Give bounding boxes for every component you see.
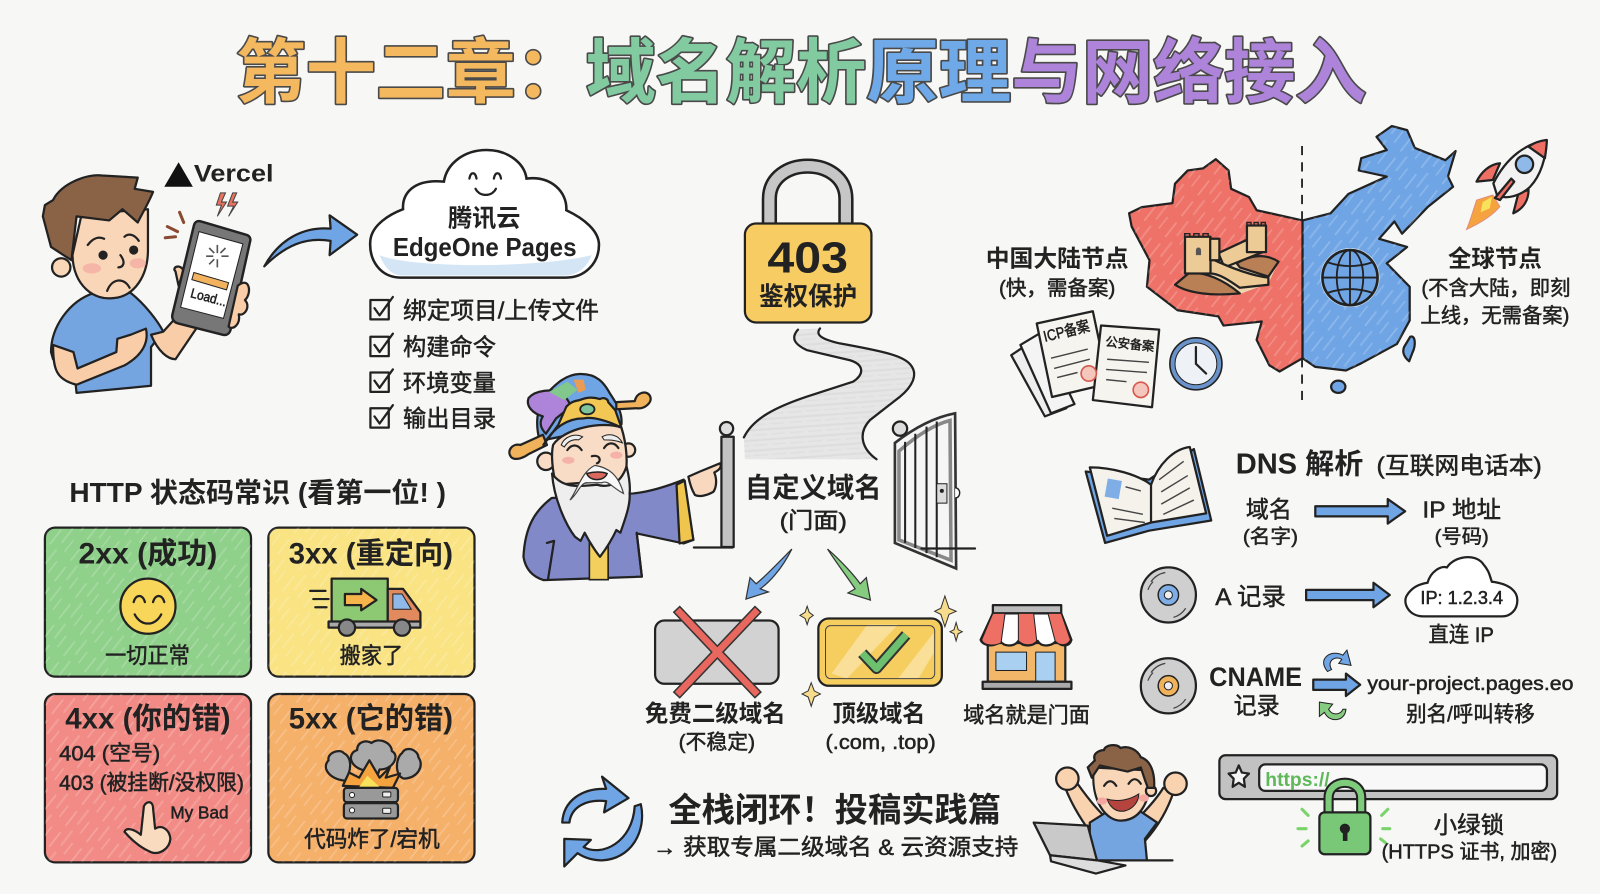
panel: 5xx: 5xx (它的错) [289, 703, 453, 736]
icon: green lock [1298, 783, 1390, 854]
CNAME row: your-project.pages.eo [1367, 673, 1573, 695]
beard [552, 466, 630, 557]
free subdomain card [645, 612, 786, 754]
browser address bar [1219, 755, 1557, 799]
cloud product: EdgeOne Pages [393, 234, 577, 262]
HTTP heading: HTTP 状态码常识 (看第一位! ) [69, 477, 446, 508]
map right labels [1420, 245, 1570, 327]
icon: clock [1170, 338, 1222, 390]
practice heading: 全栈闭环！投稿实践篇 [668, 792, 1001, 830]
arrow: green down right [828, 549, 870, 600]
panel: 2xx: 2xx (成功) [79, 537, 217, 570]
happy kid with laptop [1034, 745, 1187, 874]
IP cloud [1405, 557, 1517, 616]
icon: documents [1011, 311, 1159, 416]
worried user with phone [43, 175, 250, 393]
icon: phone book [1086, 447, 1211, 543]
map right labels: 上线，无需备案) [1420, 304, 1569, 327]
map: mainland China nodes [1129, 159, 1303, 371]
DNS heading [1236, 449, 1542, 481]
title [236, 16, 1366, 118]
icon: cycle arrows [562, 777, 642, 866]
laptop [1034, 823, 1097, 860]
road [744, 328, 914, 459]
panel: 3xx: 3xx (重定向) [289, 537, 453, 570]
map left labels [986, 245, 1129, 300]
storefront: 域名就是门面 [963, 704, 1090, 728]
checklist: 输出目录 [403, 406, 496, 432]
gate post [694, 422, 734, 548]
free subdomain card: 免费二级域名 [645, 701, 786, 727]
CNAME row [1209, 650, 1573, 727]
top-level domain card: 顶级域名 [833, 701, 926, 727]
icon: A record disc [1141, 567, 1196, 623]
panel: 3xx: 搬家了 [340, 643, 403, 668]
custom domain label [745, 472, 882, 534]
DNS heading: DNS 解析 [1236, 449, 1363, 481]
A record row: A 记录 [1215, 584, 1286, 611]
checklist: 构建命令 [403, 334, 496, 360]
arrow to cloud [264, 215, 357, 266]
CNAME row: 记录 [1234, 692, 1280, 718]
title: 原理 [866, 33, 1011, 112]
practice heading: → 获取专属二级域名 & 云资源支持 [653, 835, 1018, 860]
panel: 2xx [45, 528, 251, 677]
panel: 4xx: 404 (空号) [59, 741, 160, 765]
Vercel label [164, 161, 273, 188]
sage [509, 374, 721, 580]
panel: 4xx: 403 (被挂断/没权限) [59, 771, 244, 795]
title: 与网络接入 [1011, 33, 1366, 112]
CNAME row: 别名/呼叫转移 [1406, 703, 1535, 727]
padlock 403: 403 [767, 233, 848, 282]
storefront [963, 605, 1090, 728]
hat [537, 374, 622, 441]
phone [172, 221, 250, 335]
panel: 2xx: 一切正常 [105, 643, 190, 668]
A record row: IP: 1.2.3.4 [1420, 587, 1503, 608]
domain to IP row [1243, 496, 1501, 548]
alert marks [165, 212, 184, 238]
icon: exploding server [326, 740, 421, 818]
checklist: 绑定项目/上传文件 [403, 297, 599, 323]
browser address bar: https:// [1265, 769, 1330, 791]
map left labels: 中国大陆节点 [986, 245, 1129, 271]
top-level domain card: (.com, .top) [826, 732, 936, 754]
domain to IP row: (号码) [1435, 526, 1489, 548]
checklist: 环境变量 [403, 370, 496, 396]
icon: truck [310, 579, 420, 636]
panel: 4xx: 4xx (你的错) [65, 703, 231, 736]
panel: 4xx [45, 694, 251, 862]
icon: globe [1320, 248, 1380, 307]
domain to IP row: 域名 [1246, 496, 1292, 522]
top-level domain card [818, 618, 942, 754]
icon: smiley [120, 579, 176, 634]
Vercel label: Vercel [194, 161, 273, 188]
panel: 4xx: My Bad [170, 802, 229, 822]
domain to IP row: IP 地址 [1422, 496, 1501, 522]
green lock label: 小绿锁 [1434, 812, 1504, 838]
gate door [893, 413, 975, 568]
sparkles [800, 596, 962, 706]
A record row: 直连 IP [1429, 623, 1494, 647]
lightning icon [216, 193, 238, 216]
practice heading [653, 792, 1018, 860]
icon: CNAME disc [1141, 658, 1196, 713]
checklist [370, 297, 599, 432]
padlock 403: 鉴权保护 [759, 283, 857, 311]
map right labels: 全球节点 [1448, 245, 1542, 271]
custom domain label: 自定义域名 [745, 472, 882, 503]
panel: 3xx [268, 528, 474, 677]
icon: pointing hand [124, 802, 170, 853]
panel: 5xx: 代码炸了/宕机 [304, 827, 440, 852]
map right labels: (不含大陆，即刻 [1421, 277, 1570, 300]
CNAME row: CNAME [1209, 662, 1302, 692]
green lock label: (HTTPS 证书, 加密) [1382, 840, 1557, 863]
icon: documents: ICP备案 [1042, 317, 1091, 346]
map left labels: (快，需备案) [999, 277, 1115, 300]
custom domain label: (门面) [780, 509, 847, 534]
A record row [1215, 557, 1517, 647]
arrow: blue down left [746, 549, 792, 599]
domain to IP row: (名字) [1243, 526, 1298, 548]
padlock 403 [745, 166, 871, 322]
green lock label [1382, 812, 1557, 863]
icon: documents: 公安备案 [1105, 334, 1155, 354]
face [537, 453, 555, 470]
phone loading label: Load... [189, 285, 228, 309]
EdgeOne cloud [370, 150, 599, 278]
DNS heading: (互联网电话本) [1377, 453, 1542, 479]
title: 域名解析 [586, 33, 866, 112]
free subdomain card: (不稳定) [679, 731, 755, 754]
icon: great wall [1175, 222, 1279, 295]
icon: rocket [1466, 140, 1547, 230]
panel: 5xx [268, 694, 474, 862]
map divider [1301, 146, 1303, 403]
title: 第十二章： [236, 16, 586, 118]
cloud name: 腾讯云 [448, 205, 520, 233]
map: global nodes [1303, 126, 1456, 393]
